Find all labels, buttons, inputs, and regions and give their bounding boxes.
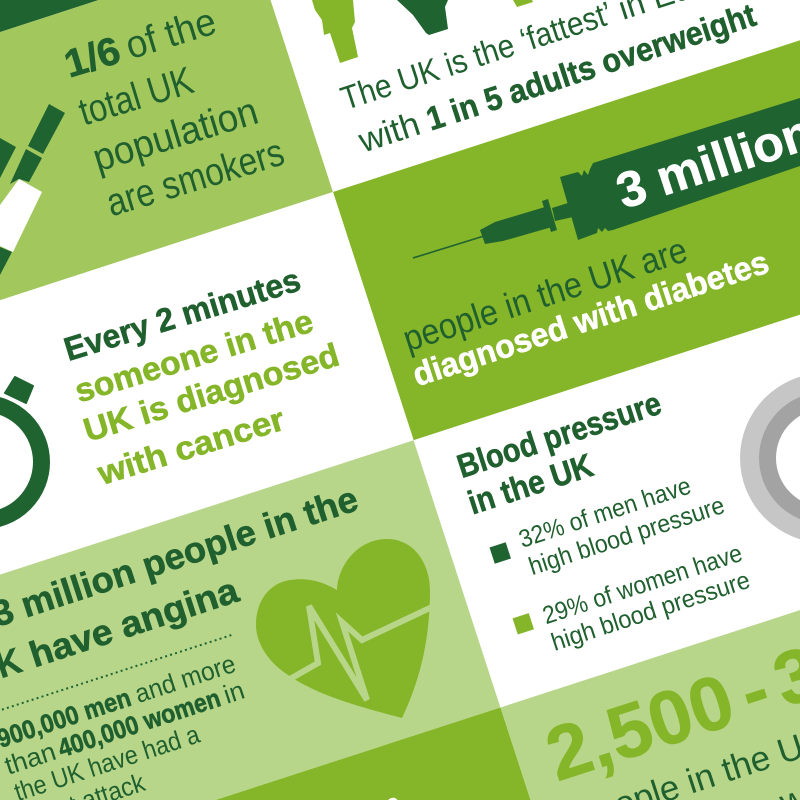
chart: blood pressure rings [740,373,800,543]
icon: stopwatch [0,377,42,520]
legend: men [486,464,728,591]
panel: blood pressure [414,224,800,707]
legend: women: high blood pressure [548,566,753,657]
text: 1/6 of the total UK population are smokers [59,0,289,225]
text: every 2 minutes someone in the UK is diagnosed with cancer: Every 2 minutes [60,261,305,368]
panel: diabetes [313,0,800,440]
legend: women [511,539,754,666]
heading: blood pressure in the UK [452,384,677,521]
text: heart attack figures: and more [131,648,239,709]
text: 1/6 of the total UK population are smokers: population [88,90,263,180]
text: heart attack figures: than [1,736,60,781]
number: 2,500 - 3,000: 2,500 [536,658,744,798]
heading: million people have angina: have [24,610,118,675]
number: 2,500 - 3,000: - [729,646,780,735]
heading: million people have angina [0,478,378,693]
text: heart attack figures: in [220,675,248,710]
legend: men: 32% of men have [515,472,694,554]
text: every 2 minutes someone in the UK is diagnosed with cancer: someone in the [70,302,317,409]
text: every 2 minutes someone in the UK is diagnosed with cancer: UK is diagnosed [79,336,343,449]
icon: syringe [413,98,800,258]
panel: overweight [240,0,800,192]
text: 1/6 of the total UK population are smokers: 1/6 [59,29,125,87]
legend: men: high blood pressure [525,491,728,581]
heading: million people have angina: angina [114,569,244,646]
text: 1/6 of the total UK population are smokers: are smokers [102,131,289,225]
text: every 2 minutes someone in the UK is diagnosed with cancer [55,256,357,492]
text: people in the UK are: people in the UK are [398,229,692,359]
dotted divider [0,635,232,711]
text: 1 in 5 adults overweight [353,0,761,161]
panel: smokers [0,0,333,377]
text: heart attack figures: 400,000 women [54,683,224,763]
icon: body silhouettes [312,0,533,63]
panel: top-left dark band [0,0,254,135]
icon: heart with pulse [256,539,432,718]
legend: women: 29% of women have [539,539,746,630]
text: 1/6 of the total UK population are smokers: total UK [74,59,198,134]
icon: cigarettes [0,104,65,275]
text: diagnosed with diabetes: diagnosed with diabetes [408,243,773,393]
text: heart attack figures [0,648,266,800]
text: every 2 minutes someone in the UK is diagnosed with cancer: with cancer [92,400,289,492]
panel: angina [0,440,500,800]
heading: blood pressure in the UK: in the UK [463,446,598,521]
heading: blood pressure in the UK: Blood pressure [452,384,666,485]
text: 1/6 of the total UK population are smokers: of the [121,0,221,68]
number: 2,500 - 3,000 [536,584,800,798]
text: 1 in 5 adults overweight: with [353,105,425,161]
panel: bottom-right statistic [500,491,800,800]
panel: cancer [0,192,414,626]
